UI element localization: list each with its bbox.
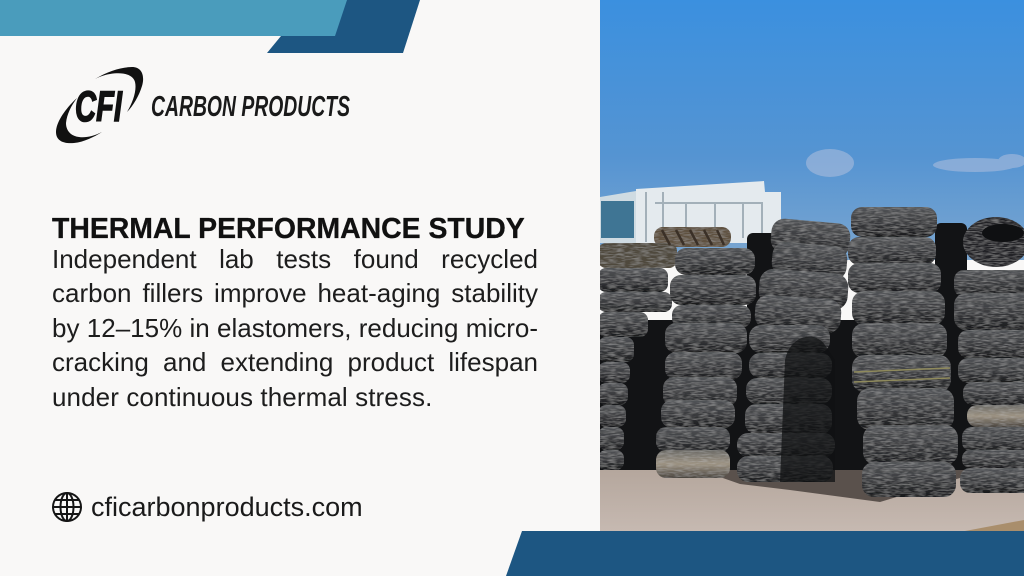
- body text: carbon fillers improve heat-aging stability: [52, 278, 538, 308]
- tread marks on brown tire: [662, 230, 724, 245]
- stack 5: [954, 217, 1024, 493]
- all tire stacks with grain: [598, 207, 1024, 497]
- clouds: [806, 149, 1024, 177]
- body text: by 12–15% in elastomers, reducing micro-: [52, 313, 538, 343]
- logo: CFI Carbon Products: [56, 67, 350, 144]
- website url: cficarbonproducts.com: [91, 492, 363, 522]
- stack 3: [737, 218, 851, 482]
- body text: under continuous thermal stress.: [52, 382, 432, 412]
- building: [600, 181, 781, 243]
- stack 1: [598, 227, 731, 470]
- heading: THERMAL PERFORMANCE STUDY: [52, 213, 525, 245]
- stack 4: [848, 207, 958, 497]
- ground: [600, 465, 1024, 531]
- logo: CFI Carbon Products: CFI: [75, 83, 123, 131]
- shadow on stack 3: [780, 337, 835, 482]
- photo: stacked used tires: [600, 0, 1024, 531]
- icon: globe: [52, 492, 82, 522]
- back tires and shadow fill: [600, 223, 1024, 502]
- stack 2: [656, 248, 756, 478]
- top accent bars: [0, 0, 420, 53]
- tire hole: [982, 224, 1024, 242]
- body text: Independent lab tests found recycled: [52, 244, 538, 274]
- body text: [52, 244, 538, 412]
- body text: cracking and extending product lifespan: [52, 347, 538, 377]
- sky: [600, 0, 1024, 260]
- yellowed stripes on stack 4: [854, 368, 950, 382]
- bottom accent bar: [506, 531, 1024, 576]
